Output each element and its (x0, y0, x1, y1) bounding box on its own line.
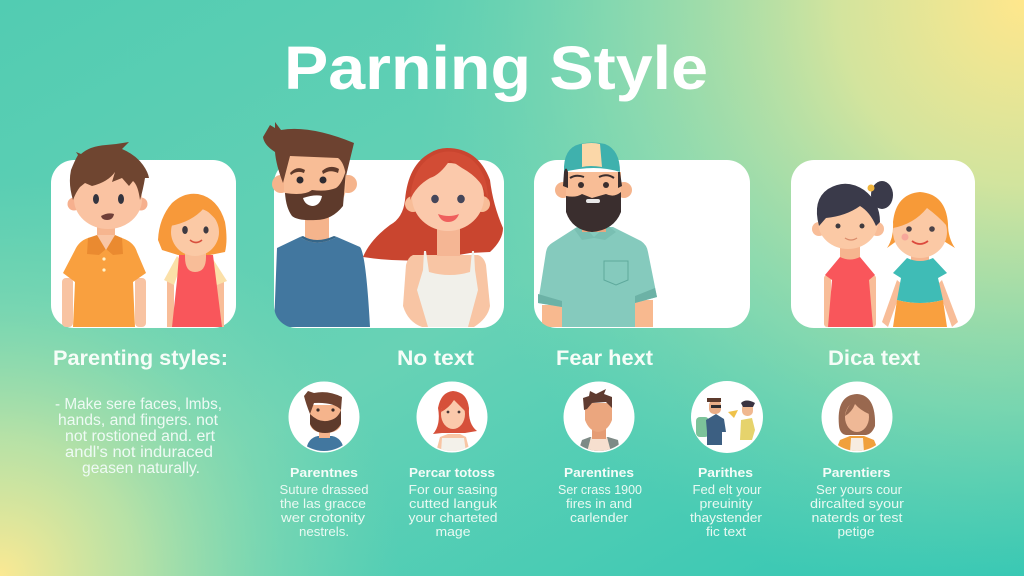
card 3 background (534, 160, 750, 328)
text block: caption 2: Percar totoss (409, 465, 495, 480)
panel: two girls (791, 160, 975, 328)
figure: dark-haired girl in red (812, 181, 893, 327)
heading: no text: No text (397, 347, 474, 370)
card 4 background (791, 160, 975, 328)
text block: caption 2 (408, 465, 498, 539)
heading: dica text: Dica text (828, 347, 920, 370)
title: Parning Style (284, 34, 708, 102)
text block: parenting styles description: geasen naturally. (82, 460, 200, 477)
text block: caption 1 (280, 465, 369, 539)
figure: boy in orange polo (62, 142, 149, 327)
text block: caption 3 (558, 465, 642, 525)
text block: parenting styles description: hands, and fingers. not (58, 412, 219, 429)
text block: caption 3: Ser crass 1900 (558, 483, 642, 497)
panel: children, boy and girl (51, 142, 236, 328)
text block: caption 4: preuinity (700, 497, 753, 511)
figure: mother with red hair (363, 148, 503, 327)
heading: parenting styles: Parenting styles: (53, 347, 228, 370)
text block: caption 3: carlender (570, 511, 628, 525)
icon: red-haired woman avatar (416, 382, 488, 452)
text block: caption 4: Parithes (698, 465, 753, 480)
icon: two figures exchanging an object (691, 381, 763, 453)
text block: caption 4: fic text (706, 525, 747, 539)
card 1 background (51, 160, 236, 328)
text block: caption 5 (810, 465, 904, 539)
icon: young man avatar (564, 382, 634, 452)
figure: girl in red dress (158, 194, 227, 327)
text block: caption 2: cutted languk (409, 497, 498, 511)
figure: orange-haired girl in teal (882, 192, 958, 327)
text block: parenting styles description: - Make sere faces, lmbs, (55, 396, 222, 413)
text block: caption 1: nestrels. (299, 525, 349, 539)
text block: caption 1: wer crotonity (280, 511, 366, 525)
text block: caption 5: petige (838, 525, 875, 539)
icon: bearded man avatar (288, 382, 360, 452)
text block: caption 5: naterds or test (812, 511, 903, 525)
text block: caption 4: Fed elt your (692, 483, 762, 497)
text block: caption 4 (690, 465, 762, 539)
card 2 background (274, 160, 504, 328)
icon: brown-haired woman avatar (822, 382, 892, 452)
figure: bearded man in teal shirt (538, 142, 657, 327)
text block: caption 1: the las gracce (280, 497, 366, 511)
text block: caption 2: mage (436, 525, 471, 539)
text block: caption 3: fires in and (566, 497, 632, 511)
text block: caption 2: For our sasing (408, 483, 498, 497)
panel: parents, father and mother (263, 122, 504, 328)
text block: parenting styles description: not rostioned and. ert (65, 428, 216, 445)
text block: parenting styles description (55, 396, 222, 477)
text block: caption 5: Ser yours cour (816, 483, 902, 497)
text block: parenting styles description: andl's not induraced (65, 444, 213, 461)
text block: caption 1: Parentnes (290, 465, 358, 480)
heading: fear hext: Fear hext (556, 347, 653, 370)
text block: caption 5: dircalted syour (810, 497, 904, 511)
text block: caption 2: your charteted (408, 511, 498, 525)
text block: caption 5: Parentiers (822, 465, 890, 480)
text block: caption 3: Parentines (564, 465, 634, 480)
panel: father with cap (534, 142, 750, 328)
text block: caption 4: thaystender (690, 511, 762, 525)
text block: caption 1: Suture drassed (280, 483, 369, 497)
figure: father in blue sweater (263, 122, 370, 327)
